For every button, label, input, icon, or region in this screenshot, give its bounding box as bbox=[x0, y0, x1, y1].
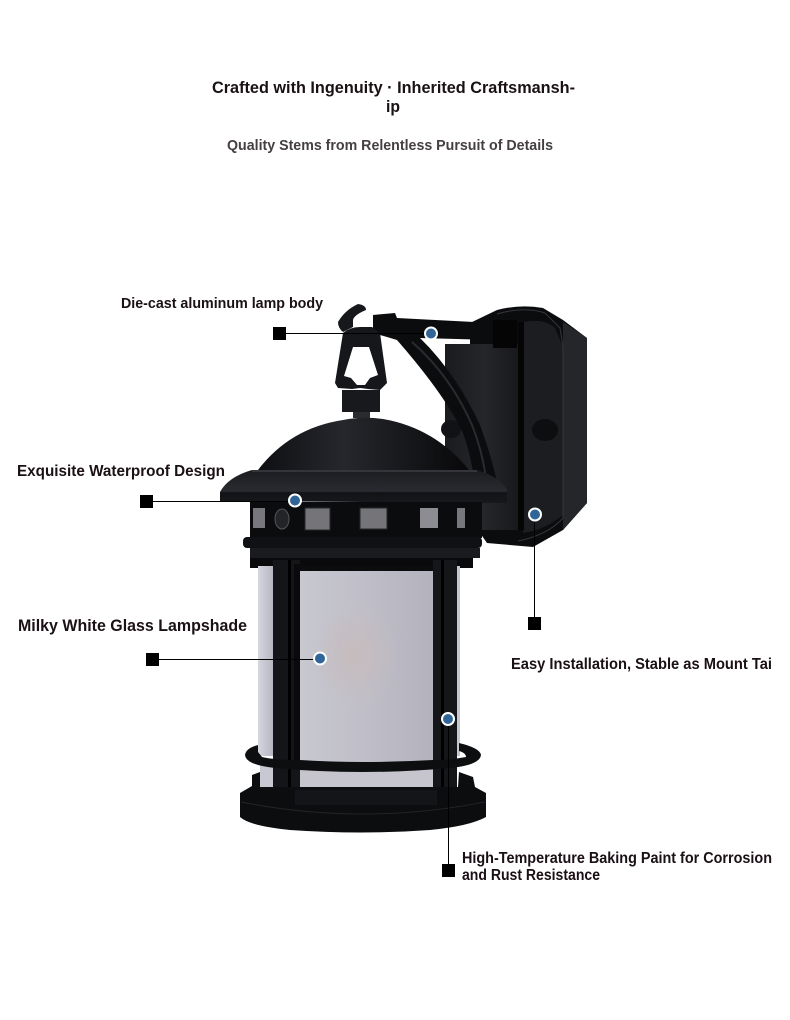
callout: high-temperature baking paint: High-Temperature Baking Paint for Corrosion bbox=[462, 850, 772, 867]
lower ring bbox=[245, 743, 481, 772]
callout: exquisite waterproof design bbox=[17, 463, 301, 508]
callout: high-temperature baking paint bbox=[442, 713, 772, 884]
subtitle: Quality Stems from Relentless Pursuit of Details bbox=[227, 137, 553, 154]
callout: easy installation: Easy Installation, Stable as Mount Tai bbox=[511, 656, 772, 673]
title: Crafted with Ingenuity · Inherited Craftsmansh- bbox=[212, 78, 575, 97]
glass shade bbox=[258, 566, 460, 791]
hanging hook bbox=[335, 304, 387, 418]
callout: high-temperature baking paint: and Rust Resistance bbox=[462, 867, 600, 884]
callout: milky white glass lampshade: Milky White Glass Lampshade bbox=[18, 617, 247, 635]
callout: easy installation bbox=[511, 508, 772, 673]
base bbox=[240, 772, 486, 832]
lamp illustration bbox=[220, 304, 587, 832]
callout: exquisite waterproof design: Exquisite Waterproof Design bbox=[17, 463, 225, 480]
dome bbox=[258, 418, 469, 470]
wall backplate bbox=[445, 306, 587, 547]
gallery with windows bbox=[250, 502, 482, 538]
callout: die-cast aluminum lamp body: Die-cast aluminum lamp body bbox=[121, 295, 324, 312]
callout: die-cast aluminum lamp body bbox=[121, 295, 437, 340]
brim bbox=[220, 470, 507, 503]
title: ip bbox=[386, 97, 400, 116]
mounting screws bbox=[441, 419, 558, 441]
title bbox=[212, 78, 575, 116]
callout: milky white glass lampshade bbox=[18, 617, 326, 666]
curved arm bbox=[373, 313, 517, 490]
frame posts bbox=[273, 560, 457, 800]
upper rings bbox=[243, 537, 482, 568]
